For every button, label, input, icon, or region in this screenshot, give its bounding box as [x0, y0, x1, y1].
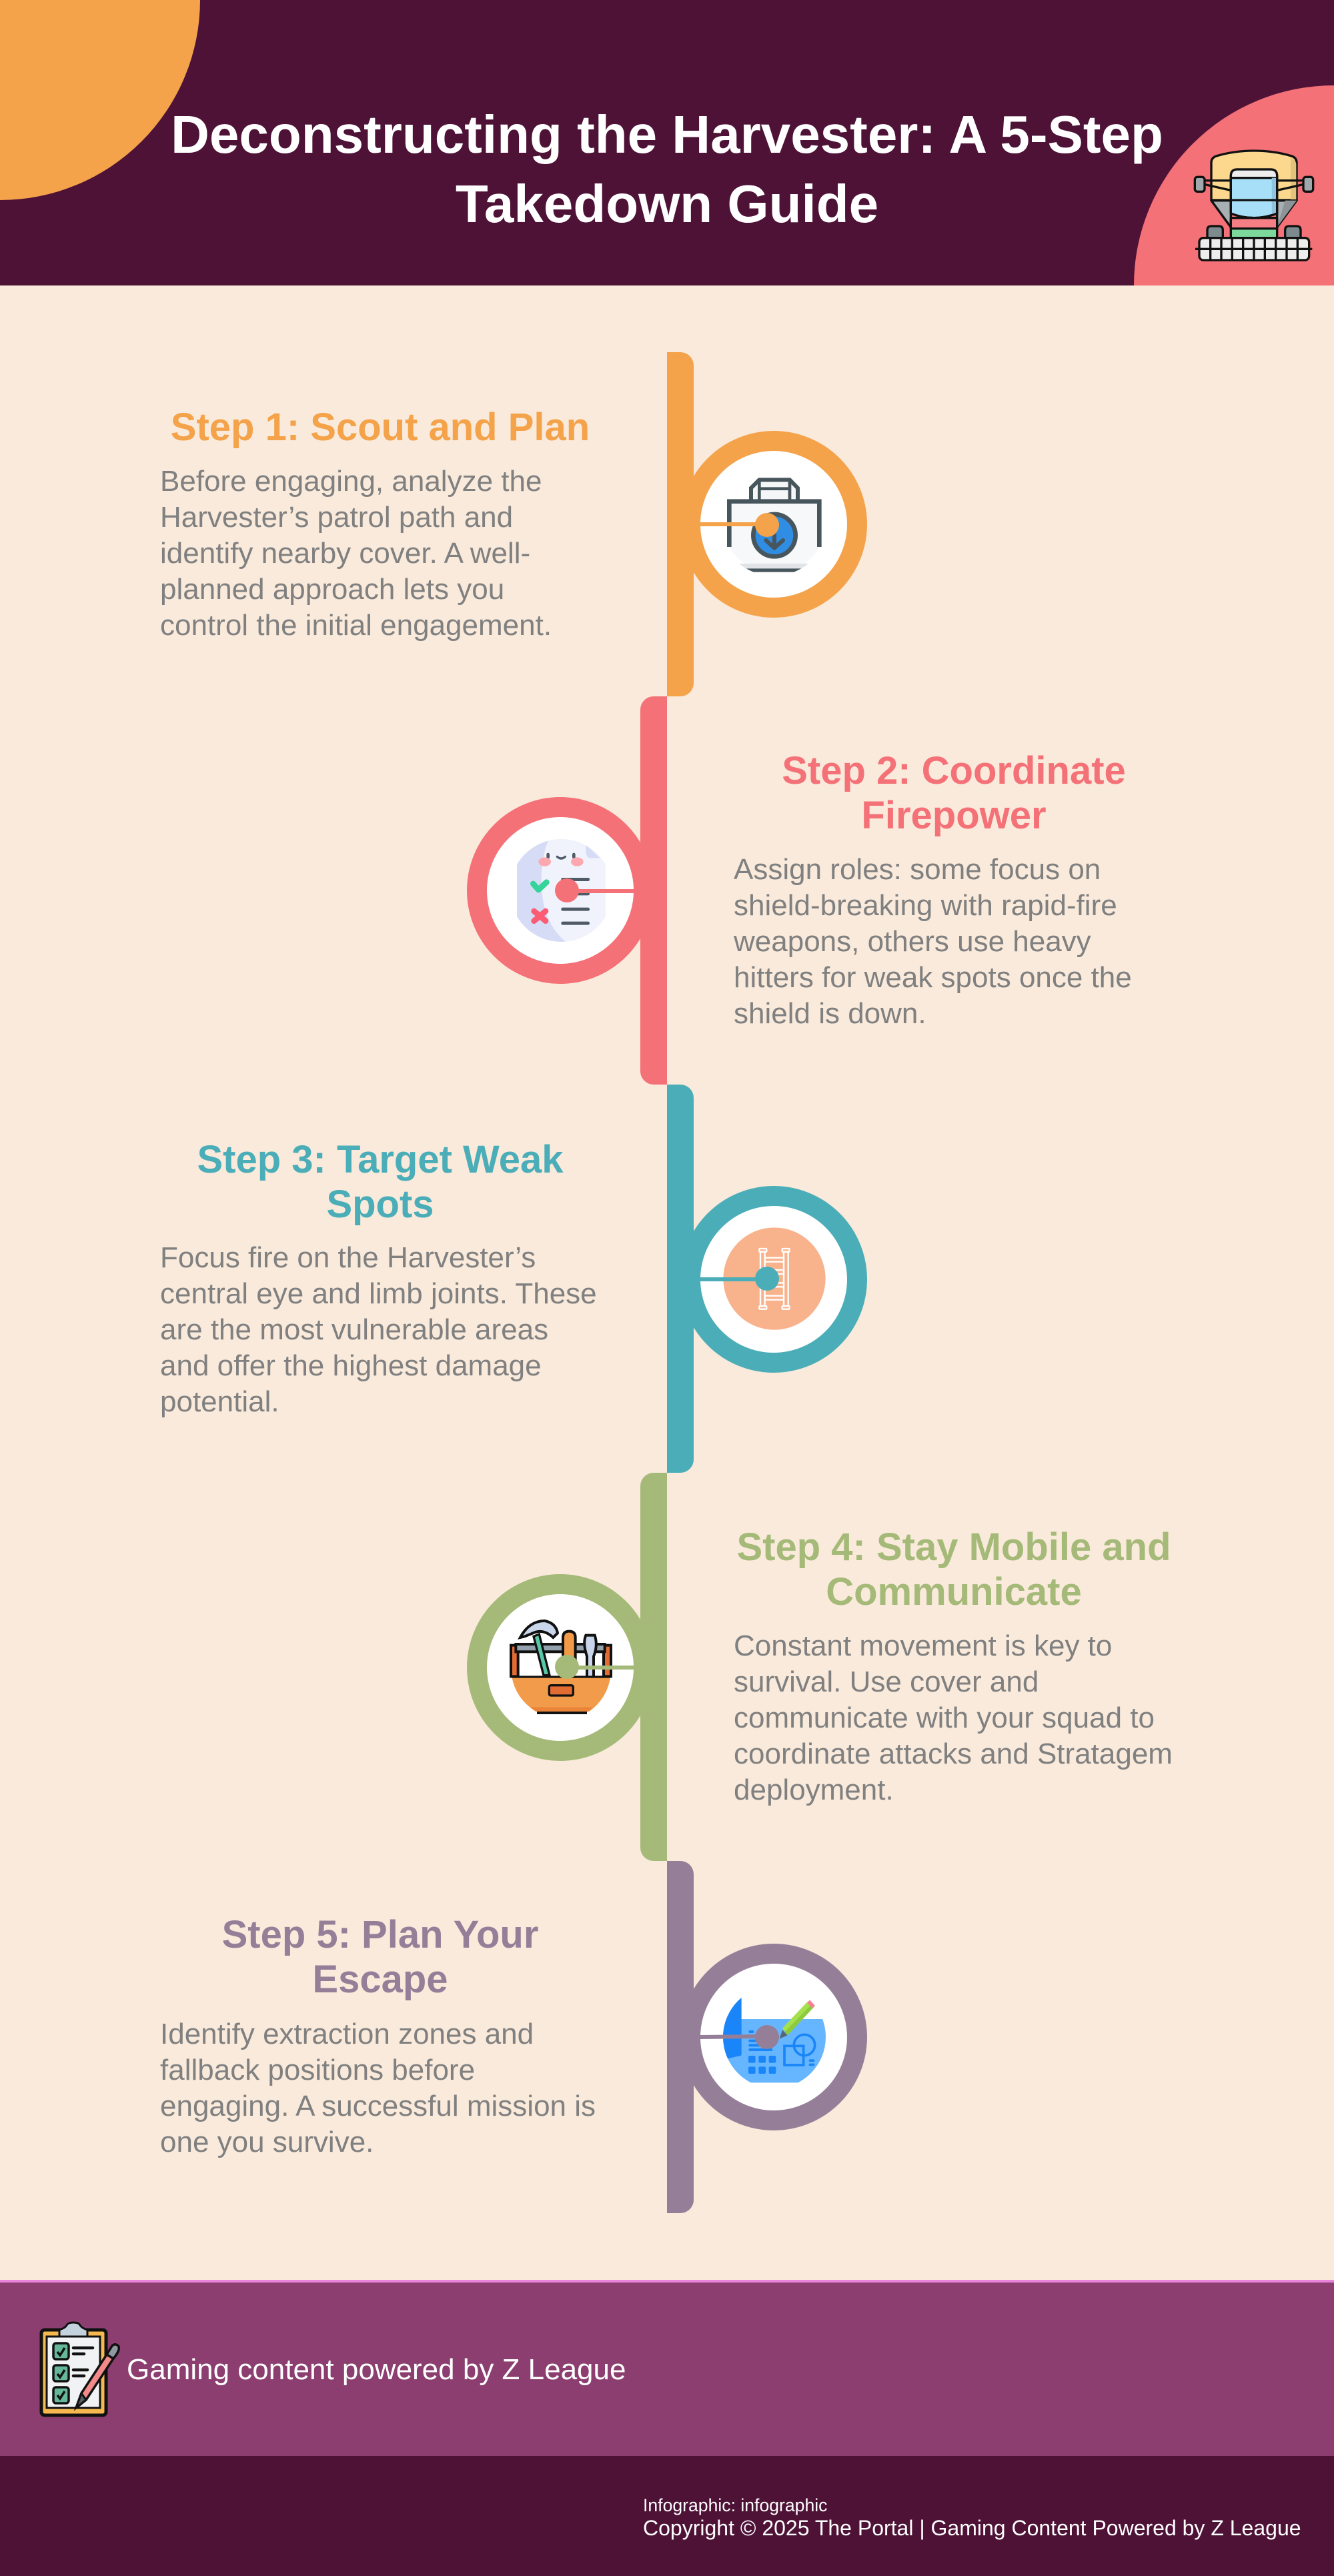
connector line and dot — [555, 878, 634, 902]
step 4 timeline graphic — [467, 1473, 667, 1861]
step 1 body text — [160, 465, 552, 642]
step 1 body text: Harvester’s patrol path and — [160, 501, 513, 534]
step 4 body text — [734, 1630, 1173, 1806]
step 5 heading — [222, 1913, 538, 2001]
vertical bar — [667, 352, 694, 696]
step 4 heading: Communicate — [826, 1570, 1082, 1614]
ring — [690, 441, 857, 608]
step 5 heading: Step 5: Plan Your — [222, 1913, 538, 1956]
step 5 panel — [160, 1861, 867, 2213]
vertical bar — [667, 1861, 694, 2213]
step 5 body text: fallback positions before — [160, 2054, 475, 2086]
connector line and dot — [700, 1267, 779, 1291]
step 3 timeline graphic — [667, 1085, 867, 1473]
step 1 body text: control the initial engagement. — [160, 609, 552, 642]
footer band — [0, 2456, 1334, 2576]
step 3 body text: central eye and limb joints. These — [160, 1277, 597, 1310]
decorative pink circle — [1134, 85, 1334, 486]
step 2 heading: Firepower — [861, 794, 1047, 837]
step 1 body text: identify nearby cover. A well- — [160, 537, 530, 570]
step 3 body text — [160, 1241, 597, 1418]
step 2 heading — [782, 749, 1126, 837]
step 4 body text: survival. Use cover and — [734, 1666, 1039, 1698]
attribution band — [0, 2280, 1334, 2456]
pink top edge line — [0, 2280, 1334, 2283]
step 3 body text: potential. — [160, 1385, 279, 1418]
step 4 body text: Constant movement is key to — [734, 1630, 1112, 1662]
step 3 body text: are the most vulnerable areas — [160, 1313, 548, 1346]
title: Deconstructing the Harvester: A 5-Step — [171, 105, 1163, 164]
step 4 body text: coordinate attacks and Stratagem — [734, 1738, 1173, 1770]
step 1 body text: Before engaging, analyze the — [160, 465, 542, 498]
icon: shopping bag with download arrow — [729, 480, 819, 572]
step 3 body text: Focus fire on the Harvester’s — [160, 1241, 536, 1274]
icon: clipboard checklist with pencil — [40, 2321, 120, 2417]
step 4 body text: deployment. — [734, 1774, 894, 1806]
step 3 heading — [197, 1138, 564, 1226]
step 2 body text: shield-breaking with rapid-fire — [734, 889, 1117, 922]
icon: blueprint with pencil — [722, 1994, 827, 2082]
step 4 body text: communicate with your squad to — [734, 1702, 1155, 1734]
step 3 heading: Spots — [326, 1183, 434, 1226]
connector line and dot — [555, 1655, 634, 1679]
title: Takedown Guide — [456, 174, 878, 233]
vertical bar — [667, 1085, 694, 1473]
step 1 heading: Step 1: Scout and Plan — [171, 406, 590, 449]
ring — [690, 1196, 857, 1363]
step 1 body text: planned approach lets you — [160, 573, 504, 606]
step 4 panel — [467, 1473, 1173, 1861]
icon: harvester — [1194, 149, 1314, 261]
infographic label: Infographic: infographic — [643, 2495, 827, 2515]
step 2 panel — [467, 696, 1132, 1085]
ring — [477, 1584, 644, 1751]
step 5 timeline graphic — [667, 1861, 867, 2213]
step 2 body text: Assign roles: some focus on — [734, 853, 1101, 886]
ring — [690, 1954, 857, 2120]
ring — [477, 807, 644, 974]
step 3 panel — [160, 1085, 867, 1473]
title — [171, 105, 1163, 233]
step 5 body text: engaging. A successful mission is — [160, 2090, 596, 2122]
step 2 timeline graphic — [467, 696, 667, 1085]
step 4 heading: Step 4: Stay Mobile and — [736, 1525, 1171, 1569]
step 5 heading: Escape — [312, 1958, 448, 2001]
decorative orange circle — [0, 0, 200, 200]
step 1 timeline graphic — [667, 352, 867, 696]
step 2 body text: shield is down. — [734, 997, 926, 1030]
step 2 body text: weapons, others use heavy — [734, 925, 1091, 958]
step 1 panel — [160, 352, 867, 696]
step 2 body text — [734, 853, 1132, 1030]
step 5 body text — [160, 2018, 596, 2158]
vertical bar — [640, 1473, 667, 1861]
copyright: Copyright © 2025 The Portal | Gaming Content Powered by Z League — [643, 2516, 1301, 2540]
step 3 body text: and offer the highest damage — [160, 1349, 542, 1382]
vertical bar — [640, 696, 667, 1085]
step 2 heading: Step 2: Coordinate — [782, 749, 1126, 792]
icon: smiling checklist page — [517, 838, 606, 942]
connector line and dot — [700, 2025, 779, 2049]
step 3 heading: Step 3: Target Weak — [197, 1138, 564, 1181]
icon: ladder on peach disc — [723, 1227, 826, 1330]
connector line and dot — [700, 513, 779, 537]
attribution text: Gaming content powered by Z League — [127, 2353, 626, 2386]
header band — [0, 0, 1334, 285]
icon: toolbox — [511, 1621, 611, 1714]
step 2 body text: hitters for weak spots once the — [734, 961, 1132, 994]
step 5 body text: one you survive. — [160, 2126, 374, 2158]
step 4 heading — [736, 1525, 1171, 1614]
step 5 body text: Identify extraction zones and — [160, 2018, 534, 2050]
